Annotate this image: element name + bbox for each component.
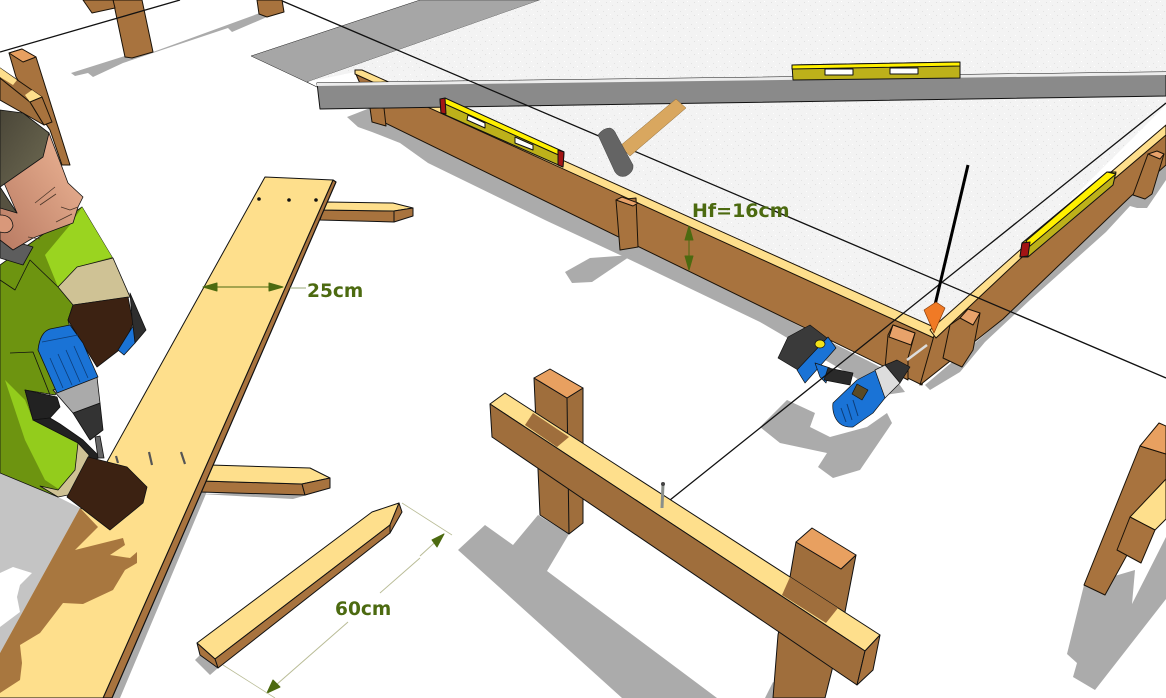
lying stake: [197, 503, 402, 668]
gravel bed: [251, 0, 1166, 335]
post left: [534, 369, 583, 534]
arrow: form height: [685, 226, 693, 270]
hammer: [598, 99, 686, 176]
label: stake length: 60cm: [335, 599, 391, 620]
corner drill: [778, 325, 927, 427]
level right: [1020, 172, 1116, 257]
label: plank width: 25cm: [307, 281, 363, 302]
nail: [661, 482, 665, 508]
level middle: [792, 62, 960, 80]
arrow: stake length: [223, 503, 452, 698]
string top-left: [0, 0, 180, 52]
facial features: [28, 187, 78, 239]
drill in hand: [38, 325, 104, 458]
formwork boards: [355, 70, 1166, 385]
shirt: [0, 207, 130, 497]
dimension arrows: [203, 226, 693, 698]
underarm: [25, 390, 60, 420]
plank: [0, 177, 336, 698]
beam: [317, 72, 1166, 109]
ear: [0, 215, 13, 233]
stakes on boards: [370, 108, 1164, 380]
sawhorse centre: [490, 369, 880, 698]
level left: [440, 98, 564, 167]
worker: [0, 110, 147, 530]
glove upper: [68, 297, 133, 367]
left board: [355, 70, 936, 385]
screw holes: [257, 197, 318, 202]
screws: [116, 452, 185, 465]
face: [0, 133, 83, 250]
top-left sawhorse: [83, 0, 284, 58]
hand shadow on plank: [0, 508, 137, 693]
post right: [773, 528, 856, 698]
sawhorse behind worker: [0, 49, 70, 165]
plumb bob: [924, 165, 968, 333]
cuff lower: [40, 443, 89, 497]
arrow: plank width: [203, 283, 306, 291]
right sawhorse: [1084, 423, 1166, 595]
stakes behind plank: [200, 202, 413, 495]
levels: [440, 62, 1116, 257]
hair: [0, 110, 49, 187]
rail: [490, 393, 880, 685]
label: form height: Hf=16cm: [692, 200, 790, 222]
shadow under worker: [0, 473, 80, 653]
right board: [920, 125, 1166, 385]
strings: [280, 0, 1166, 504]
collar: [0, 237, 33, 265]
cuff upper: [58, 258, 130, 305]
glove lower: [67, 457, 147, 530]
